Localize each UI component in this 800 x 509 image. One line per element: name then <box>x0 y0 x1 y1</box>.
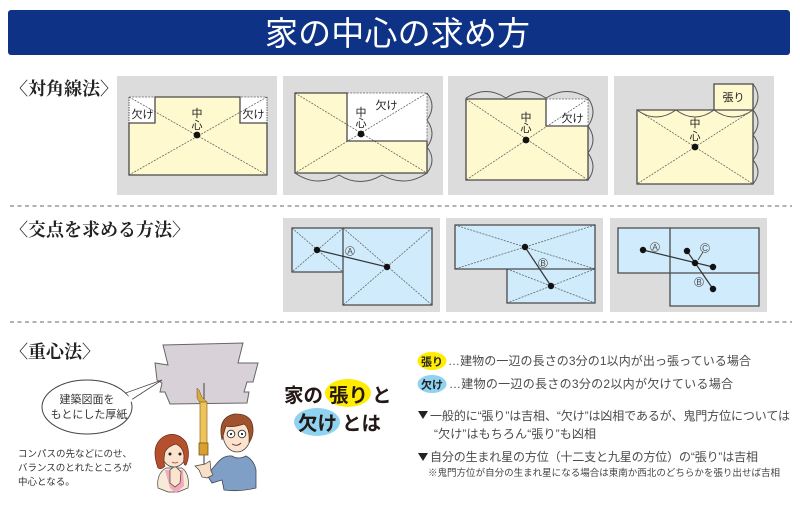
diagonal panel 4 <box>614 76 774 195</box>
diagonal panel 1: 心 <box>192 119 202 132</box>
intersection panel 3: A <box>652 243 658 252</box>
intersection panel 2: B <box>540 259 546 268</box>
intersection panel 1: A <box>347 247 353 256</box>
diagonal panel 2: 心 <box>356 117 366 130</box>
heading: what are hari and kake: 張り <box>329 385 368 407</box>
intersection panel 3 <box>610 218 767 312</box>
diagonal panel 2: 中 <box>356 106 366 119</box>
illustration: compass <box>197 383 208 476</box>
callout: cardboard: もとにした厚紙 <box>51 407 127 421</box>
diagonal panel 2 <box>283 76 443 195</box>
diagonal panel 1: 欠け <box>242 107 264 121</box>
diagonal panel 4: 張り <box>722 91 744 104</box>
heading: center of gravity method: 〈重心法〉 <box>10 342 100 362</box>
diagonal panel 3: 中 <box>520 111 532 124</box>
heading: what are hari and kake: と <box>372 385 392 407</box>
diagonal panel 4: 中 <box>690 117 700 130</box>
definition: hari: …建物の一辺の長さの3分の1以内が出っ張っている場合 <box>448 353 751 368</box>
caption: how to find balance: バランスのとれたところが <box>18 462 132 474</box>
diagonal panel 4: 心 <box>690 130 700 143</box>
caption: how to find balance: 中心となる。 <box>18 476 75 488</box>
note: fortune of hari and kake: 一般的に“張り”は吉相、“欠け”は凶相であるが、鬼門方位については <box>430 408 790 423</box>
intersection panel 3: B <box>696 278 702 287</box>
diagonal panel 2: 欠け <box>376 98 398 112</box>
diagonal panel 1: 中 <box>192 107 202 120</box>
note: fortune of hari and kake: “欠け”はもちろん“張り”も凶相 <box>434 426 596 441</box>
note: birth star direction: 自分の生まれ星の方位（十二支と九星の方位）の“張り”は吉相 <box>430 449 758 464</box>
heading: what are hari and kake: とは <box>342 413 381 435</box>
illustration: woman <box>155 434 188 493</box>
intersection panel 1 <box>283 218 440 312</box>
diagonal panel 3: 欠け <box>562 111 584 125</box>
heading: what are hari and kake: 家の <box>284 385 323 407</box>
definition: kake: 欠け <box>421 378 443 392</box>
note: birth star direction <box>418 449 780 479</box>
caption: how to find balance: コンパスの先などにのせ、 <box>18 448 132 460</box>
illustration: cardboard floor plan <box>155 343 258 404</box>
heading: intersection method: 〈交点を求める方法〉 <box>10 219 190 240</box>
diagonal panel 1 <box>117 76 277 195</box>
intersection panel 3: C <box>702 244 708 253</box>
heading: diagonal method: 〈対角線法〉 <box>10 79 118 99</box>
callout: cardboard: 建築図面を <box>60 392 114 406</box>
diagonal panel 3: 心 <box>520 122 532 135</box>
definition: hari: 張り <box>421 356 443 368</box>
note: fortune of hari and kake <box>418 408 790 441</box>
heading: what are hari and kake <box>284 379 392 436</box>
caption: how to find balance <box>18 448 132 488</box>
diagonal panel 1: 欠け <box>132 107 154 121</box>
title banner <box>8 10 790 55</box>
title banner: 家の中心の求め方 <box>265 15 530 52</box>
heading: what are hari and kake: 欠け <box>298 412 337 435</box>
note: birth star direction: ※鬼門方位が自分の生まれ星になる場合は東南か西北のどちらかを張り出せば吉相 <box>428 467 780 479</box>
callout: cardboard <box>42 380 162 434</box>
intersection panel 2 <box>446 218 603 312</box>
diagonal panel 3 <box>448 76 608 195</box>
illustration: man <box>195 414 256 491</box>
definition: kake: …建物の一辺の長さの3分の2以内が欠けている場合 <box>449 376 733 391</box>
